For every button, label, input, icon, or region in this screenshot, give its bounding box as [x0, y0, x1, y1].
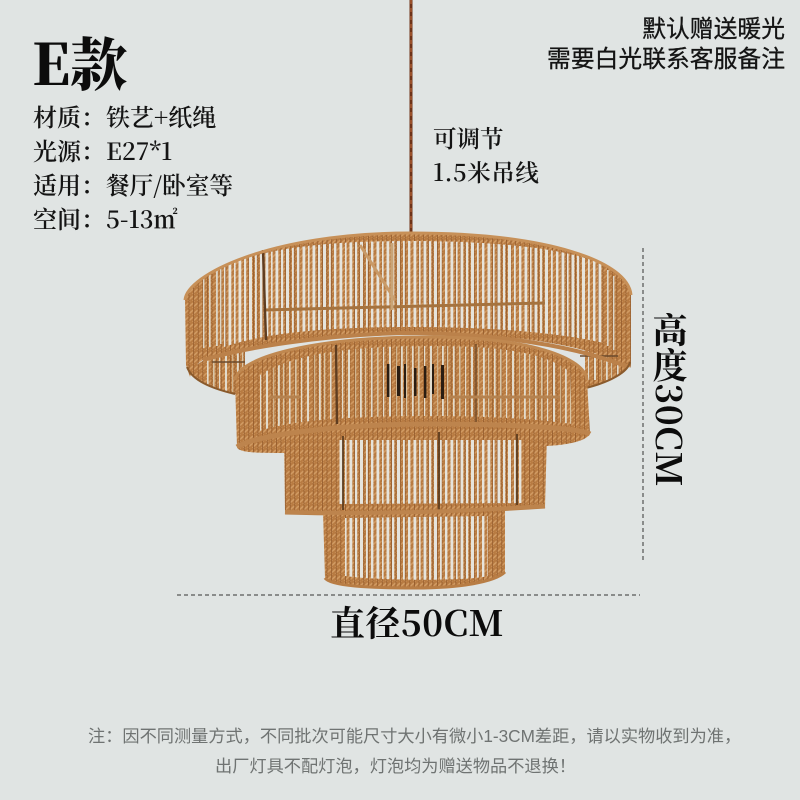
lamp tier 2	[235, 337, 590, 453]
title: E款	[32, 20, 127, 102]
spec list: 餐厅/卧室等	[106, 167, 233, 201]
lamp tier 1	[185, 233, 631, 396]
gift note: 需要白光联系客服备注	[547, 46, 785, 73]
footnote line 1: 注：因不同测量方式，不同批次可能尺寸大小有微小1-3CM差距，请以实物收到为准，	[88, 726, 741, 746]
height dimension line	[642, 248, 644, 561]
tier 4 openings	[345, 516, 488, 580]
hanging cord	[410, 0, 412, 234]
tier 3 openings	[338, 440, 524, 506]
tier 2 frame post	[336, 344, 476, 424]
spec: space: 空间：	[33, 200, 105, 235]
width dimension line	[177, 594, 640, 596]
tier 1 openings	[224, 236, 604, 351]
lamp tier 3	[284, 426, 547, 514]
lamp tier 4	[323, 508, 505, 588]
tier 2 lower rim	[237, 424, 590, 447]
tier 1 frame details	[185, 233, 631, 394]
tier 2 openings	[256, 344, 572, 434]
tier 3 frame posts	[343, 432, 517, 510]
spec list	[33, 98, 233, 235]
cord note: 1.5米吊线	[433, 154, 540, 188]
tier 1 side openings	[203, 266, 614, 350]
height label: 高度30CM	[645, 312, 695, 487]
spec list: E27*1	[106, 132, 172, 167]
spec: material: 材质：	[33, 98, 105, 133]
footnote line 2: 出厂灯具不配灯泡，灯泡均为赠送物品不退换！	[215, 756, 576, 776]
gift note: 默认赠送暖光	[642, 16, 785, 43]
tier 2 inner socket shadow	[387, 364, 444, 399]
lamp illustration	[177, 0, 644, 596]
tier 1 right inner crescent	[585, 350, 626, 386]
diameter label: 直径50CM	[330, 597, 504, 647]
cord note: 可调节	[433, 120, 504, 154]
tier 1 main band	[185, 233, 631, 377]
spec: usage: 适用：	[33, 166, 105, 201]
spec: light source	[33, 132, 172, 167]
tier 1 left inner crescent	[192, 352, 245, 394]
tier 3 lower rim	[285, 506, 545, 513]
spec: usage	[33, 166, 233, 201]
footnote	[88, 726, 741, 776]
cord note	[433, 120, 540, 188]
spec: material	[33, 98, 216, 133]
gift note	[547, 16, 785, 73]
spec list: 铁艺+纸绳	[106, 98, 216, 133]
spec: light source: 光源：	[33, 132, 105, 167]
spec list: 5-13㎡	[106, 200, 178, 235]
spec: space	[33, 200, 178, 235]
